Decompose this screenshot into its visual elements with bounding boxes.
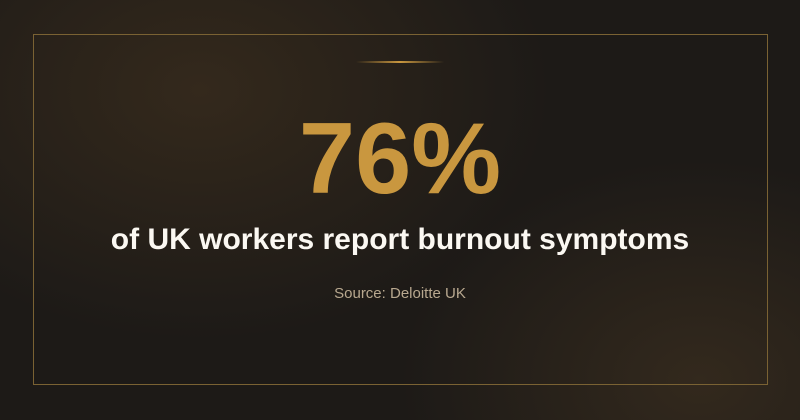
source: Source: Deloitte UK bbox=[334, 285, 466, 302]
frame border bbox=[33, 34, 768, 385]
big statistic: 76% bbox=[299, 103, 501, 215]
accent line bbox=[356, 61, 444, 63]
subtitle: of UK workers report burnout symptoms bbox=[111, 223, 689, 256]
